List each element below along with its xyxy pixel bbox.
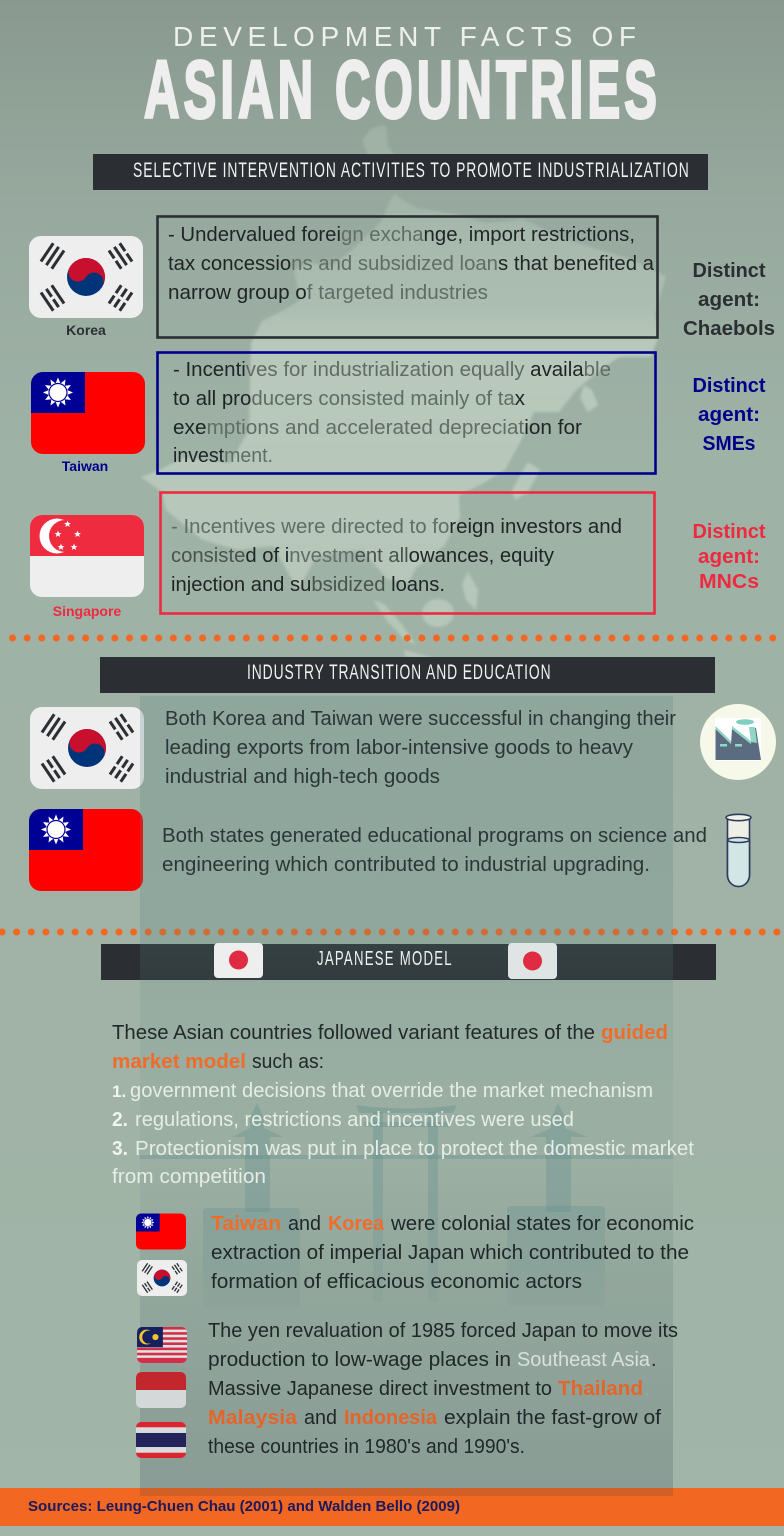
text block: yen revaluation: and [304,1407,337,1429]
agent: SMEs: Distinct [692,375,766,397]
text box: Korea [158,216,658,338]
icon: Japan flag right [508,943,557,979]
text block: yen revaluation: Malaysia [208,1407,298,1429]
text box: Taiwan: exemptions and accelerated depreciat ion for [173,417,582,439]
panel: Taiwan [31,352,766,474]
text block: yen revaluation [208,1320,678,1458]
text box: Singapore: consisted of investment allowances, equity [171,545,554,567]
text block: education: engineering which contributed to industrial upgrading. [162,854,650,876]
icon: factory [700,704,776,780]
text block: guided market model: such as: [252,1051,324,1073]
text block: yen revaluation: , [644,1378,650,1400]
text block: guided market model: from competition [112,1166,266,1188]
text block: colonial states: Taiwan [211,1213,281,1235]
text block: yen revaluation: The yen revaluation of 1985 forced Japan to move its [208,1320,678,1342]
small flags column [136,1214,187,1458]
text block: guided market model: 2. [112,1109,128,1131]
text block: colonial states: Korea [328,1213,385,1235]
agent: MNCs [692,521,766,593]
torii and lanterns [140,1103,673,1308]
agent: MNCs: Distinct [692,521,766,543]
icon: Taiwan flag small [136,1214,186,1249]
section heading: industry transition: INDUSTRY TRANSITION AND EDUCATION [247,660,551,684]
text block: industry transition: industrial and high-tech goods [165,766,440,788]
panel: Korea [29,216,775,340]
agent: Chaebols: Distinct [692,260,766,282]
text box: Singapore: injection and subsidized loans. [171,574,445,596]
footer: sources: Sources: Leung-Chuen Chau (2001) and Walden Bello (2009) [28,1498,460,1515]
panel: industry transition [29,707,144,891]
text block: colonial states [211,1213,694,1293]
agent: SMEs: SMEs [702,433,756,455]
agent: MNCs: MNCs [699,571,759,593]
text block: colonial states: were colonial states for economic [390,1213,694,1235]
icon: Singapore flag [30,515,144,597]
text box: Taiwan: investment. [173,445,273,467]
agent: MNCs: agent: [698,546,760,568]
footer: sources [0,1488,784,1526]
text box: Singapore [160,492,654,614]
text block: colonial states: formation of efficacious economic actors [211,1271,582,1293]
agent: SMEs [692,375,766,455]
text block: education: Both states generated educational programs on science and [162,825,707,847]
icon: Korea flag small [137,1260,187,1296]
text block: guided market model: regulations, restrictions and incentives were used [135,1109,574,1131]
icon: Korea flag [30,707,144,789]
text block: guided market model: 1. [112,1082,126,1101]
icon: Indonesia flag [136,1372,186,1408]
text block: yen revaluation: Thailand [558,1378,643,1400]
text box: Singapore: - Incentives were directed to fo reign investors and [171,516,622,538]
label: Korea: Korea [66,322,106,338]
text box: Taiwan [158,352,656,474]
text block: colonial states: and [288,1213,321,1235]
icon: Japan flag left [214,943,263,978]
text block: yen revaluation: explain the fast-grow of [444,1407,661,1429]
text block: yen revaluation: production to low-wage places in [208,1349,511,1371]
text block: yen revaluation: Massive Japanese direct investment to [208,1378,552,1400]
section heading: selective intervention [93,154,708,190]
text block: colonial states: extraction of imperial Japan which contributed to the [211,1242,689,1264]
text block: guided market model [112,1022,694,1188]
text block: industry transition: Both Korea and Taiwan were successful in changing their [165,708,676,730]
section heading: industry transition [100,657,715,693]
heading text: Japanese model: JAPANESE MODEL [317,947,452,970]
section heading: selective intervention: SELECTIVE INTERVENTION ACTIVITIES TO PROMOTE INDUSTRIALIZATION [133,158,689,182]
icon: Thailand flag [136,1422,186,1458]
text box: Taiwan: to all producers consisted mainly of ta x [173,388,525,410]
text block: guided market model: 3. [112,1138,128,1160]
translucent panel overlay [140,696,673,1496]
agent: Chaebols: Chaebols [683,318,775,340]
section heading bar: Japanese model [101,944,716,980]
text box: Korea: narrow group of targeted industries [168,282,488,304]
icon: Korea flag [29,236,143,318]
agent: Chaebols [683,260,775,340]
text block: industry transition: leading exports from labor-intensive goods to heavy [165,737,633,759]
text block: yen revaluation: . [651,1349,657,1371]
map of Asia background [141,125,666,666]
label: Taiwan: Taiwan [62,458,108,474]
label: Singapore: Singapore [53,603,121,619]
text box: Taiwan: - Incentives for industrialization equally available [173,359,611,381]
icon: Taiwan flag [31,372,145,454]
text block: education [162,825,707,876]
text block: yen revaluation: these countries in 1980's and 1990's. [208,1436,525,1458]
panel: Singapore [30,492,766,619]
text block: guided market model: Protectionism was put in place to protect the domestic market [135,1138,694,1160]
text block: guided market model: guided [601,1022,668,1044]
text block: guided market model: These Asian countries followed variant features of the [112,1022,595,1044]
text block: yen revaluation: Southeast Asia [517,1349,651,1371]
text block: guided market model: government decisions that override the market mechanism [130,1080,653,1102]
agent: Chaebols: agent: [698,289,760,311]
text box: Korea: - Undervalued foreign exchange, import restrictions, [168,224,635,246]
title: ASIAN COUNTRIES [144,45,657,136]
text block: guided market model: market model [112,1051,246,1073]
text box: Korea: tax concessions and subsidized loans that benefited a [168,253,655,275]
icon: Malaysia flag [137,1327,187,1363]
agent: SMEs: agent: [698,404,760,426]
text block: industry transition [165,708,676,788]
icon: Taiwan flag [29,809,143,891]
icon: test tube [726,814,751,887]
text block: yen revaluation: Indonesia [344,1407,438,1429]
title: DEVELOPMENT FACTS OF [173,21,636,52]
